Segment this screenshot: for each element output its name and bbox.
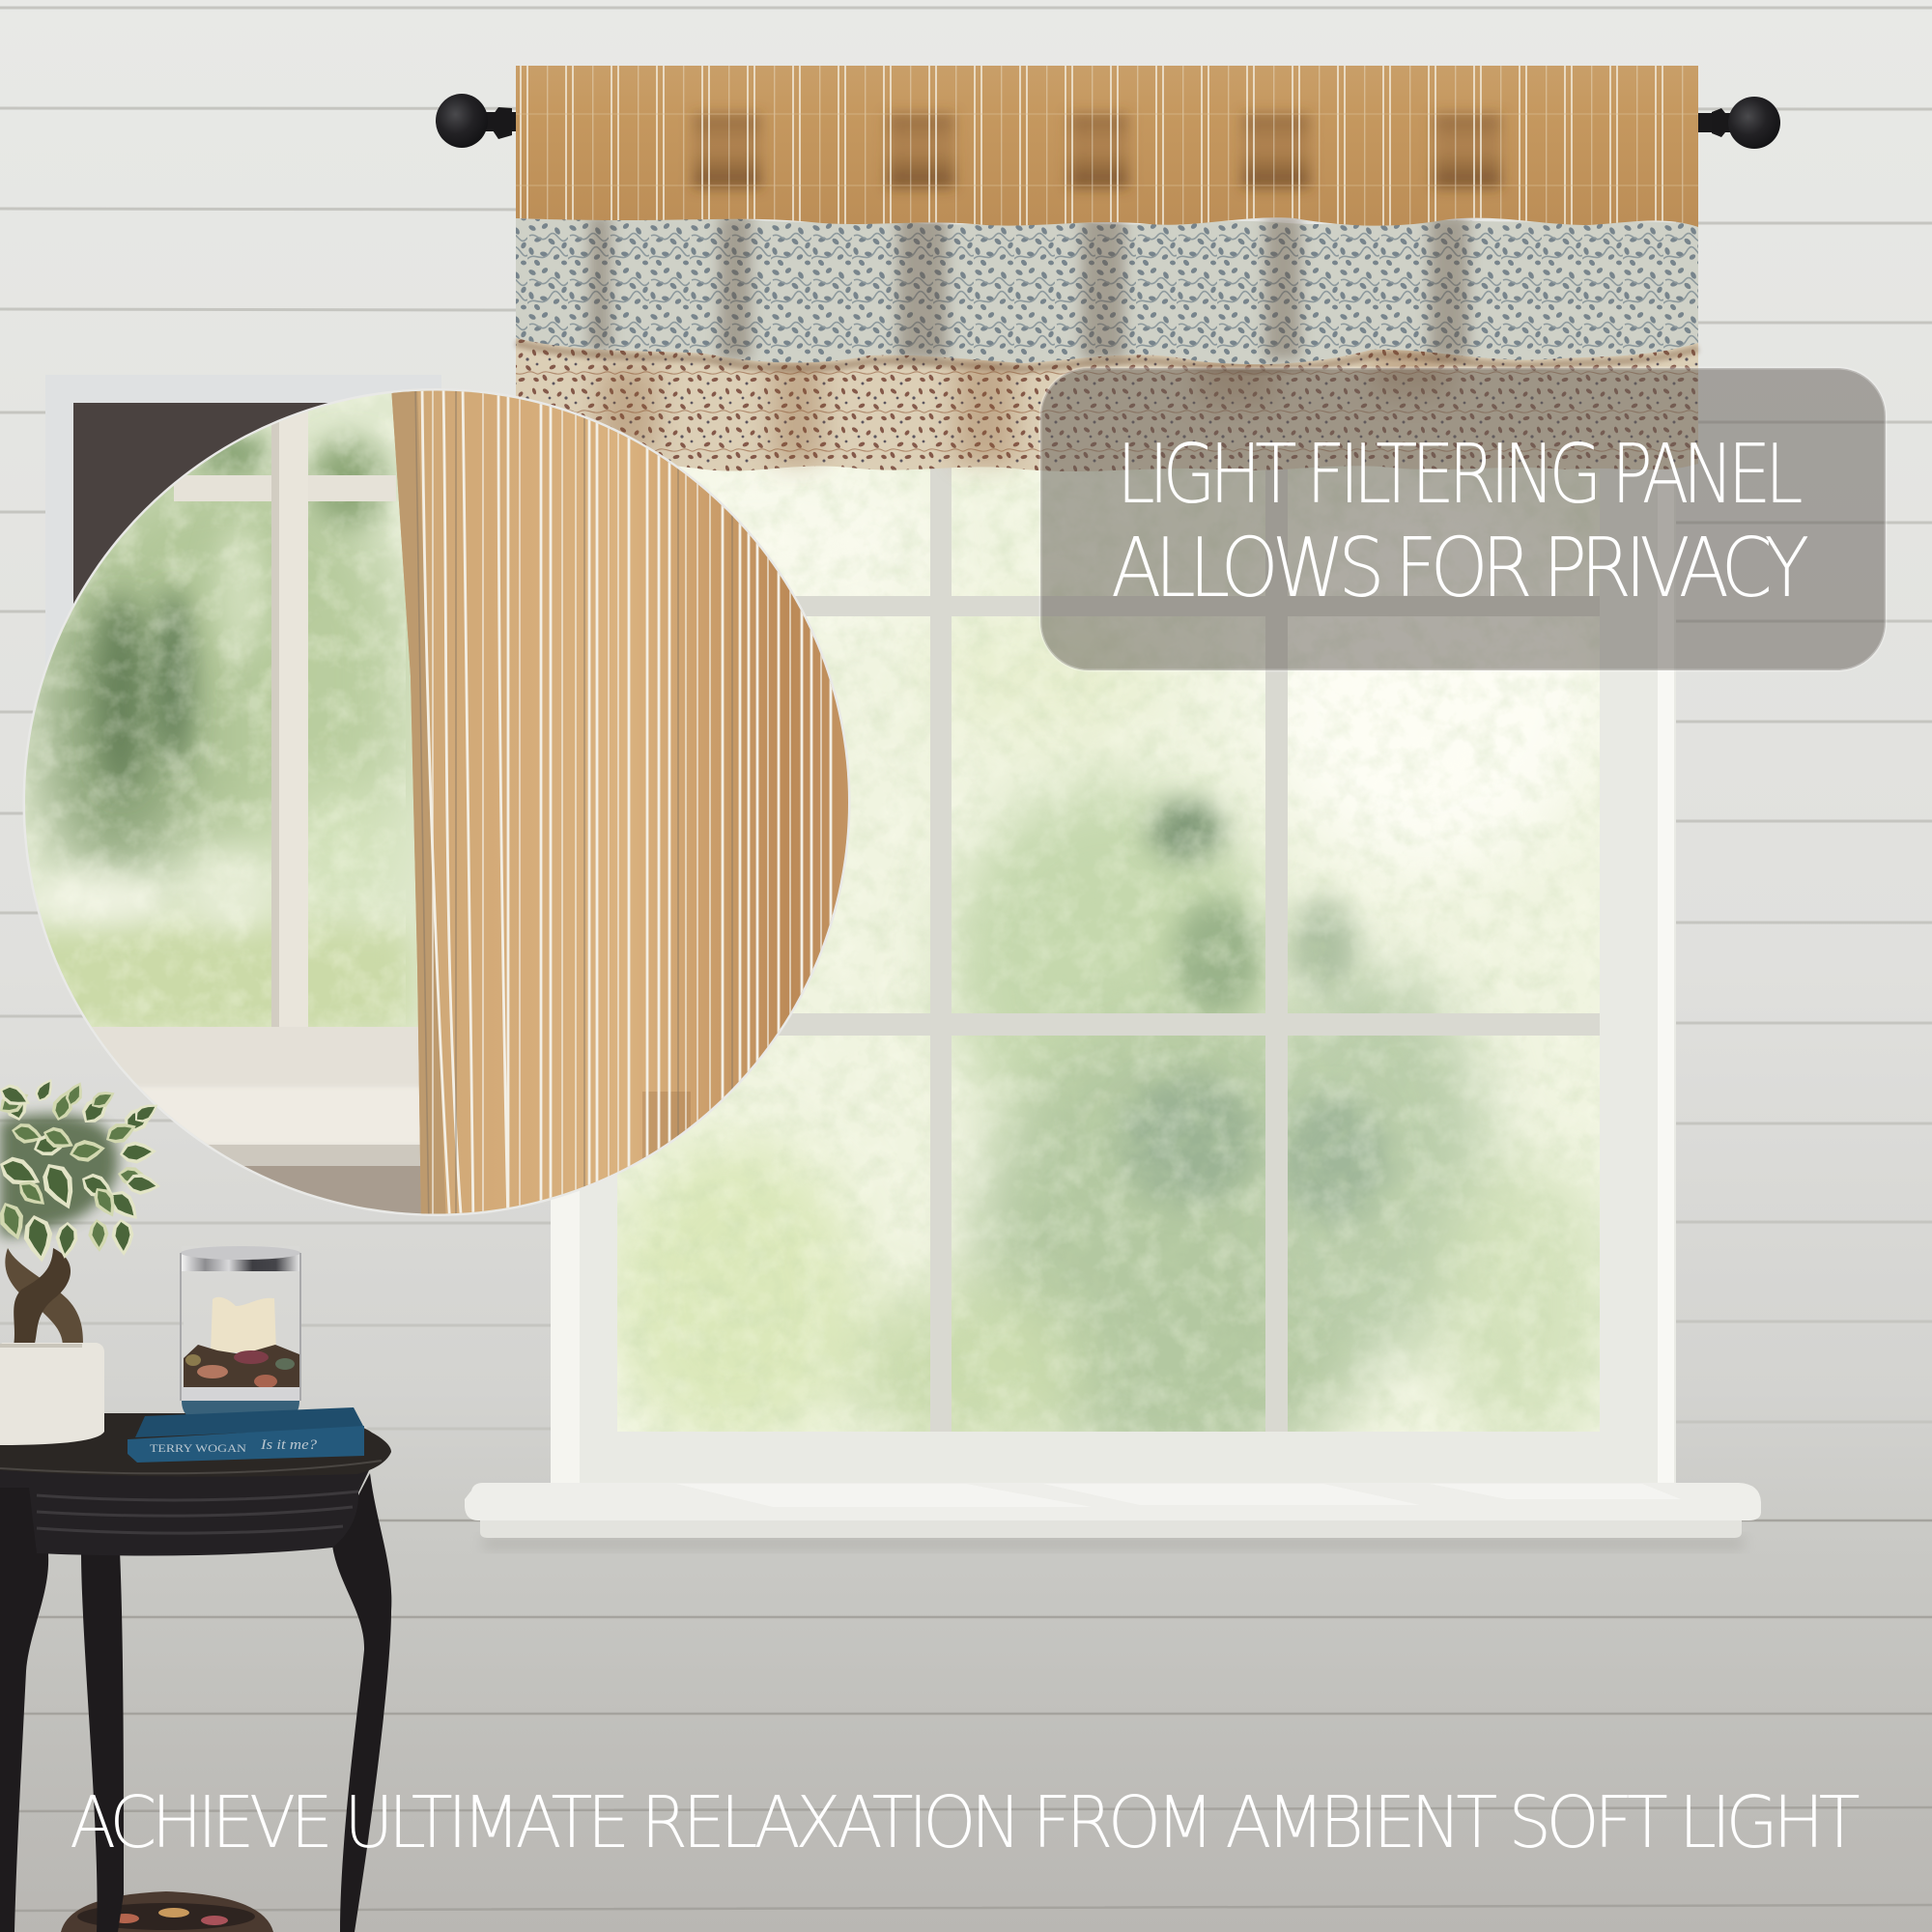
braided trunk (5, 1248, 83, 1347)
potted plant (0, 1075, 162, 1445)
glass candle holder (181, 1246, 300, 1423)
floral brown bottom ruffle (516, 338, 1698, 471)
candle (211, 1297, 276, 1352)
striped curtain inside circle (391, 386, 860, 1227)
window sill (465, 1483, 1761, 1549)
valance: layered ruffled curtain (516, 64, 1698, 471)
blue book (128, 1407, 364, 1463)
decorative bowl under table (61, 1891, 273, 1932)
window frame (551, 454, 1676, 1488)
zoom circle: fabric close-up (0, 386, 860, 1234)
curtain rod left finial (436, 94, 518, 148)
table top (0, 1413, 391, 1477)
callout panel (1040, 368, 1886, 670)
plant pot (0, 1343, 104, 1445)
bottom caption: ACHIEVE ULTIMATE RELAXATION FROM AMBIENT SOFT LIGHT (70, 1781, 1860, 1864)
sill and wall inside circle (93, 1027, 424, 1213)
potpourri (184, 1345, 299, 1391)
table legs (0, 1473, 391, 1932)
framed picture on wall (45, 375, 441, 761)
garden seen through window (25, 396, 417, 1027)
side table (0, 1413, 391, 1932)
callout background (1040, 368, 1886, 670)
curtain rod right finial (1695, 97, 1780, 149)
blue book: Is it me? (260, 1437, 318, 1453)
window frame inside circle (174, 386, 396, 1027)
foliage (0, 1075, 162, 1264)
window panes: blurred garden view (617, 466, 1600, 1432)
callout text: ALLOWS FOR PRIVACY (1111, 521, 1807, 616)
striped header band (516, 64, 1698, 233)
blue book: TERRY WOGAN (150, 1441, 246, 1455)
table apron (0, 1468, 370, 1555)
floral blue middle ruffle (516, 214, 1698, 364)
callout text: LIGHT FILTERING PANEL (1117, 427, 1802, 523)
window muntins (617, 454, 1600, 1432)
callout text (1111, 427, 1807, 616)
